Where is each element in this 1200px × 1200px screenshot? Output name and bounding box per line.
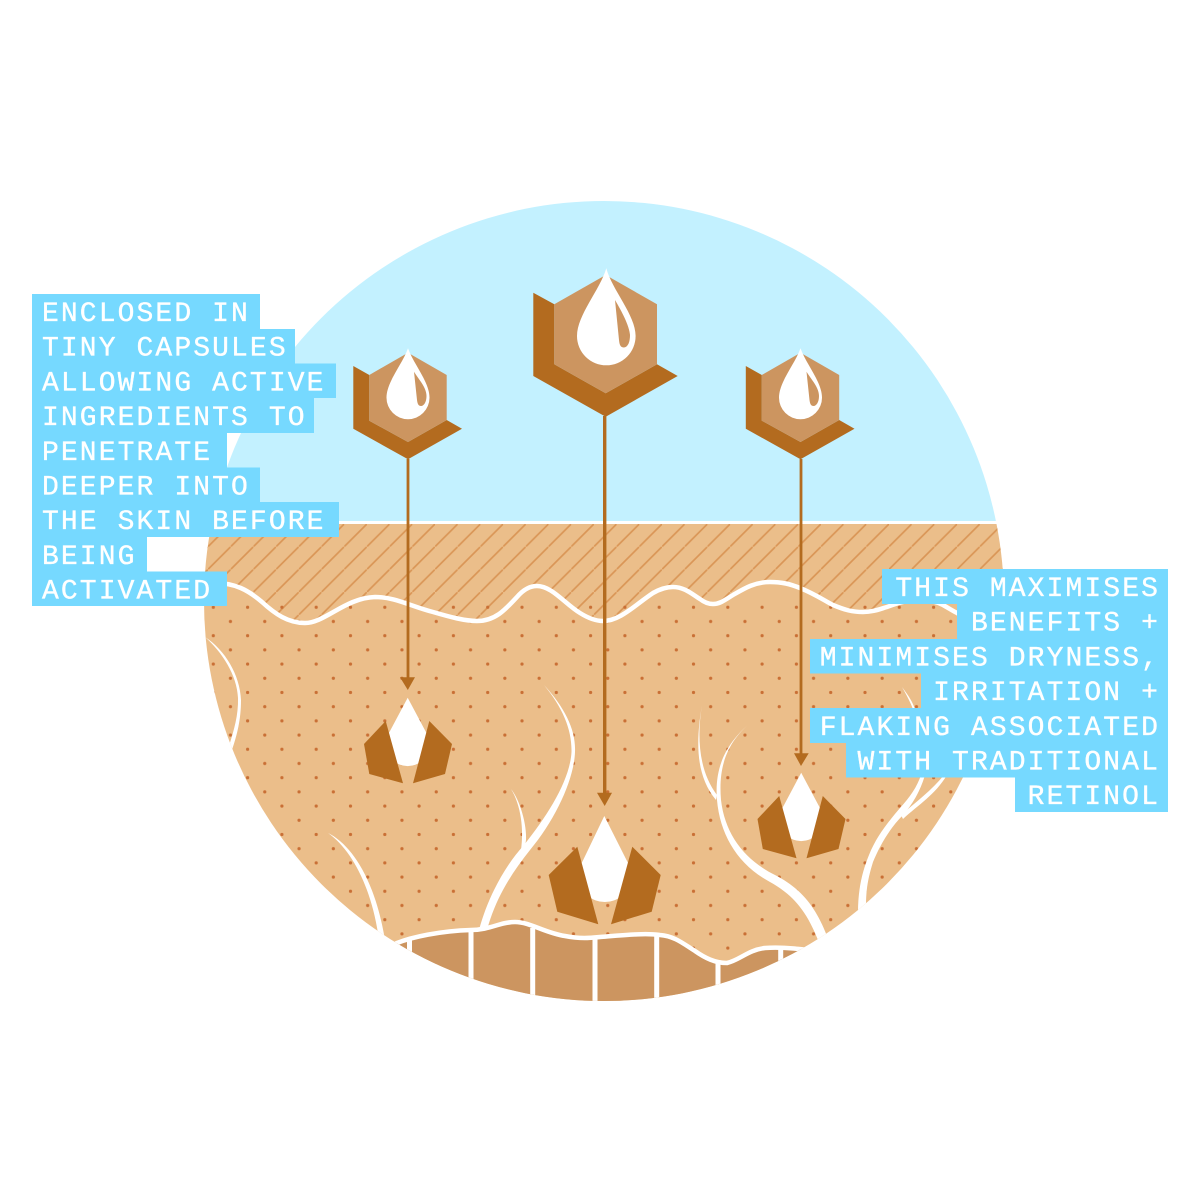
callout: left text label: ENCLOSED IN [42, 299, 250, 330]
callout: right text label: FLAKING ASSOCIATED [820, 713, 1160, 744]
callout: left text label: BEING [42, 542, 137, 573]
opened capsule: centre [549, 816, 661, 924]
skin surface wave line [227, 580, 957, 626]
callout: right text label: IRRITATION + [933, 678, 1160, 709]
white veins [205, 637, 947, 940]
bottom tissue cells [397, 922, 815, 1010]
callout: right text label: RETINOL [1028, 782, 1160, 813]
opened capsule: left [364, 698, 452, 783]
callout: left text label: DEEPER INTO [42, 472, 250, 504]
callout: left text label: PENETRATE [42, 438, 212, 469]
callout: right text label: MINIMISES DRYNESS, [820, 643, 1160, 674]
arrow: right [794, 459, 809, 766]
outer skin layer hatching [205, 524, 1003, 620]
arrow: left [400, 459, 415, 690]
callout: right text label: BENEFITS + [971, 609, 1160, 640]
callout: left text label: ACTIVATED [42, 577, 212, 608]
callout: right text label: WITH TRADITIONAL [858, 748, 1160, 778]
skin body [200, 524, 1010, 1004]
callout: left text label: ALLOWING ACTIVE [42, 368, 326, 399]
arrow: centre [597, 416, 612, 806]
opened capsule: right [758, 773, 846, 858]
callout: left text label: INGREDIENTS TO [42, 403, 307, 434]
capsule: right intact [746, 348, 854, 459]
callout: right text label: THIS MAXIMISES [895, 574, 1160, 605]
sky above the skin [200, 200, 1010, 521]
callout: left text label: THE SKIN BEFORE [42, 507, 326, 538]
capsule: left intact [353, 348, 462, 459]
callout: left text label: TINY CAPSULES [42, 334, 288, 365]
capsule: centre intact [533, 268, 678, 417]
callout: left text label [32, 294, 339, 608]
dotted dermis texture [212, 606, 952, 964]
callout: right text label [810, 569, 1168, 813]
panel: skin cross-section circle [200, 200, 1010, 1010]
